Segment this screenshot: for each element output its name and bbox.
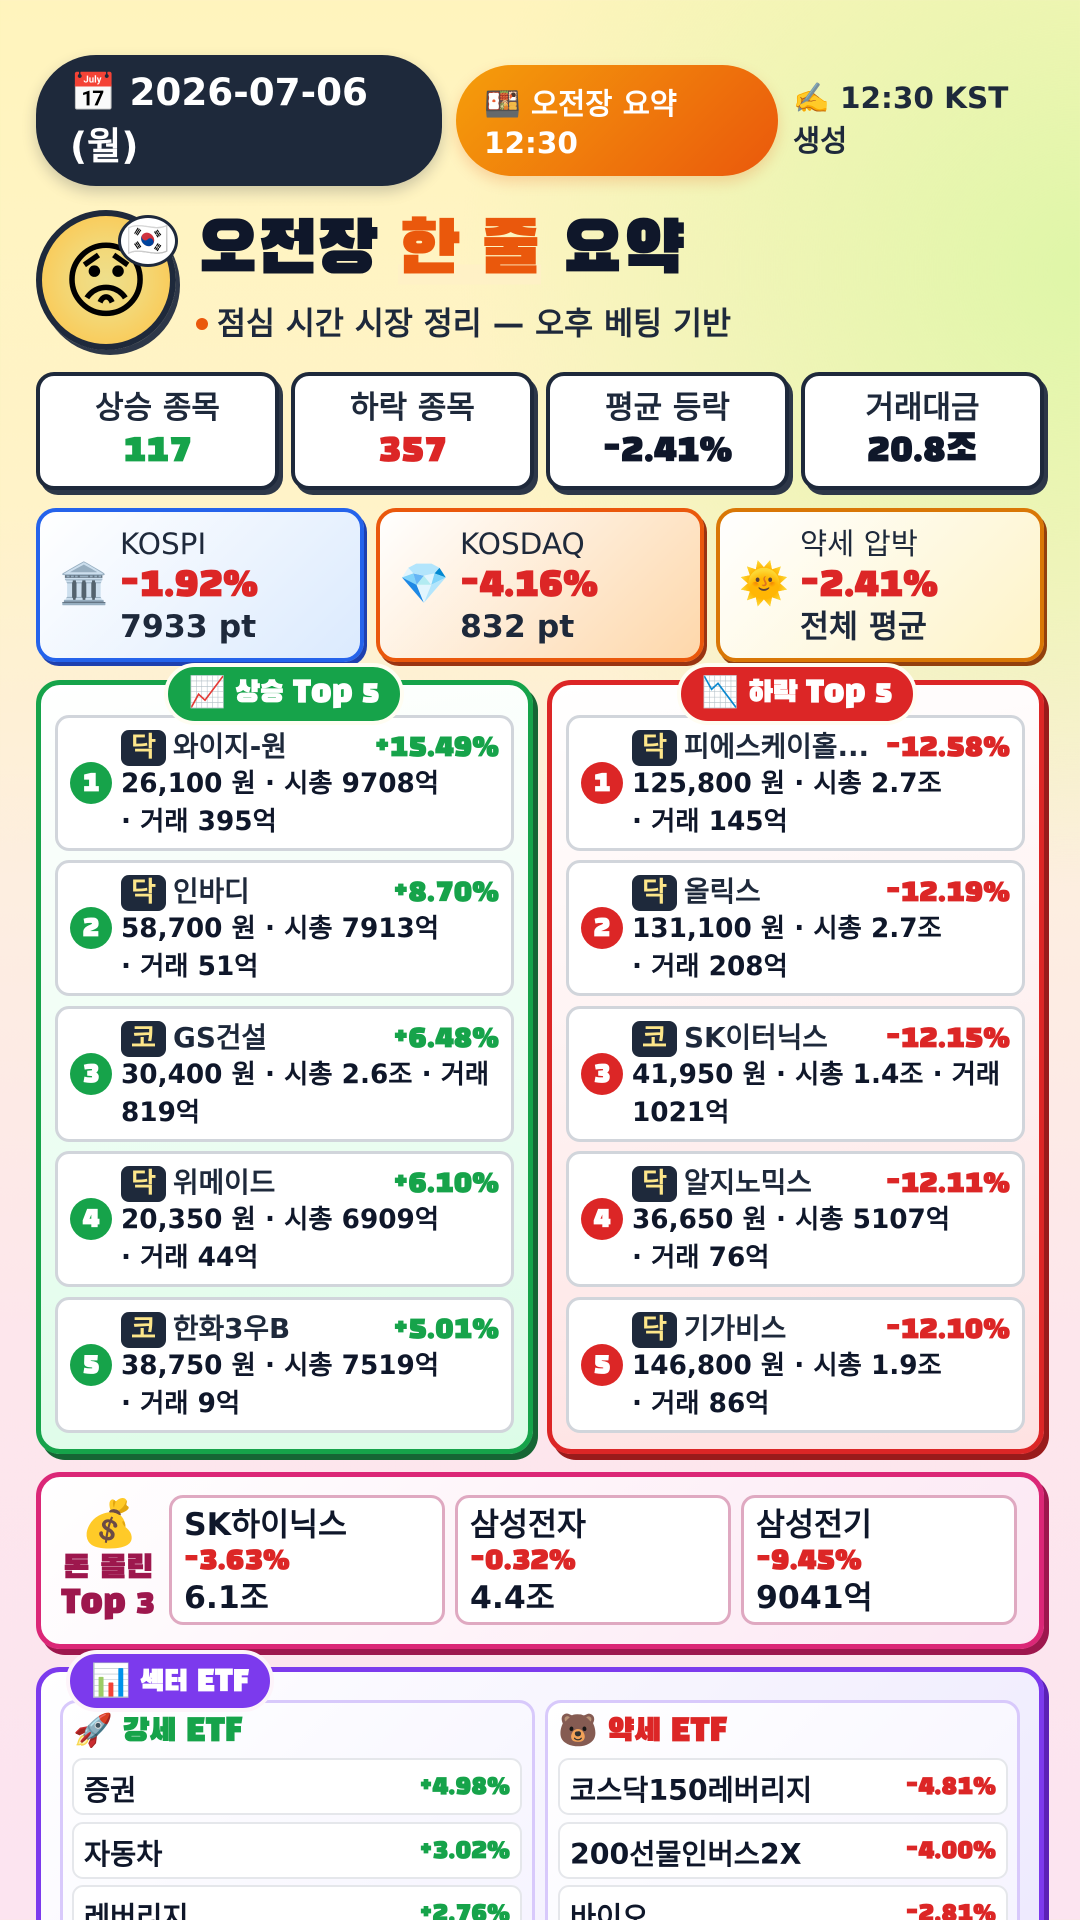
index card: KOSPI: -1.92% <box>120 564 258 605</box>
rising row 5: · 거래 9억 <box>121 1389 240 1419</box>
falling row 4: 알지노믹스 <box>684 1166 812 1199</box>
rising row 1: 26,100 원 · 시총 9708억 <box>121 769 439 799</box>
rising row 5: 5 <box>83 1351 99 1379</box>
stat: falling <box>291 372 534 490</box>
ETF row: securities <box>72 1758 522 1815</box>
rising row 3: 3 <box>83 1060 99 1088</box>
ETF row: KOSDAQ 150 leverage <box>558 1758 1008 1815</box>
rising row 4: 위메이드 <box>173 1166 275 1199</box>
rising row 4: 4 <box>83 1205 99 1233</box>
falling row 2: 131,100 원 · 시총 2.7조 <box>632 914 942 944</box>
falling row 1: 피에스케이홀... <box>684 730 869 763</box>
money flow label: Top 3 <box>61 1588 155 1620</box>
falling row 5: 기가비스 <box>684 1312 786 1345</box>
stat: average change: 평균 등락 <box>605 390 730 426</box>
index card: KOSDAQ: 832 pt <box>460 609 574 645</box>
ETF row: 200 futures inverse: -4.00% <box>906 1837 996 1864</box>
falling row 3: -12.15% <box>886 1023 1010 1054</box>
mascot icon <box>36 210 180 355</box>
ETF row: bio <box>558 1885 1008 1920</box>
rising row 2: 58,700 원 · 시총 7913억 <box>121 914 439 944</box>
strong ETF heading: 🚀 강세 ETF <box>73 1711 243 1749</box>
flag badge <box>118 215 178 267</box>
falling row 2 <box>566 860 1025 996</box>
ETF row: securities: +4.98% <box>420 1773 510 1800</box>
mascot face: 😟 <box>62 232 150 330</box>
rising row 3: GS건설 <box>173 1021 267 1054</box>
falling row 5: 146,800 원 · 시총 1.9조 <box>632 1351 942 1381</box>
falling row 1: 1 <box>594 769 610 797</box>
falling heading pill: 📉 하락 Top 5 <box>702 675 892 710</box>
money card 3: 9041억 <box>756 1580 873 1616</box>
index card: KOSPI: 🏛️ <box>59 560 109 607</box>
index card: market mood <box>716 508 1044 662</box>
rising row 4: 닥 <box>131 1168 156 1199</box>
falling row 4: 36,650 원 · 시총 5107억 <box>632 1205 950 1235</box>
rising row 3: +6.48% <box>393 1023 499 1054</box>
falling row 4: · 거래 76억 <box>632 1243 769 1273</box>
falling row 5: · 거래 86억 <box>632 1389 769 1419</box>
rising row 5: 한화3우B <box>173 1312 290 1345</box>
rising row 3: 코 <box>131 1023 156 1054</box>
rising row 3: 30,400 원 · 시총 2.6조 · 거래 <box>121 1060 489 1090</box>
falling heading pill <box>677 663 917 725</box>
rising row 5: 코 <box>131 1314 156 1345</box>
rising row 1 <box>55 715 514 851</box>
panel: falling top 5 <box>547 680 1044 1454</box>
session pill: 🍱 오전장 요약 <box>484 87 677 122</box>
panel: rising top 5 <box>36 680 533 1454</box>
stat: trading value <box>801 372 1044 490</box>
rising row 5: +5.01% <box>393 1314 499 1345</box>
sector ETF pill <box>66 1650 274 1712</box>
money card 1: SK하이닉스 <box>184 1507 347 1543</box>
subtitle: 점심 시간 시장 정리 — 오후 베팅 기반 <box>217 306 731 342</box>
falling row 3: 코 <box>642 1023 667 1054</box>
rising row 1: · 거래 395억 <box>121 807 277 837</box>
ETF row: autos: 자동차 <box>84 1838 162 1871</box>
falling row 1: · 거래 145억 <box>632 807 788 837</box>
rising row 1: 닥 <box>131 732 156 763</box>
rising row 2: · 거래 51억 <box>121 952 258 982</box>
date pill: 📅 2026-07-06 <box>70 70 368 115</box>
weak ETF heading: 🐻 약세 ETF <box>558 1711 727 1749</box>
ETF row: autos: +3.02% <box>420 1837 510 1864</box>
rising row 3 <box>55 1006 514 1142</box>
money card 1: 6.1조 <box>184 1580 269 1616</box>
stat: falling: 357 <box>378 431 447 469</box>
rising row 2: +8.70% <box>393 877 499 908</box>
ETF row: securities: 증권 <box>84 1774 136 1807</box>
stat: average change <box>546 372 789 490</box>
date pill: (월) <box>70 124 138 168</box>
money card 3: -9.45% <box>756 1545 862 1576</box>
falling row 5: 5 <box>594 1351 610 1379</box>
falling row 3 <box>566 1006 1025 1142</box>
falling row 4: 4 <box>594 1205 610 1233</box>
money flow label: 돈 몰린 <box>63 1553 153 1585</box>
falling row 2: 2 <box>594 914 610 942</box>
session pill: 12:30 <box>484 126 578 160</box>
generated time: ✍️ 12:30 KST <box>793 81 1008 116</box>
money card 1 <box>169 1495 445 1625</box>
session pill <box>456 65 778 176</box>
ETF row: autos <box>72 1822 522 1879</box>
rising row 4: · 거래 44억 <box>121 1243 258 1273</box>
generated time <box>793 81 1008 158</box>
falling row 2: 올릭스 <box>684 875 761 908</box>
money card 3: 삼성전기 <box>756 1507 872 1543</box>
ETF row: 200 futures inverse: 200선물인버스2X <box>570 1838 802 1871</box>
ETF row: 200 futures inverse <box>558 1822 1008 1879</box>
strong ETF column <box>60 1700 535 1920</box>
falling row 4: 닥 <box>642 1168 667 1199</box>
date pill <box>36 55 442 186</box>
falling row 1: -12.58% <box>886 732 1010 763</box>
index card: market mood: -2.41% <box>800 564 938 605</box>
falling row 5: -12.10% <box>886 1314 1010 1345</box>
rising row 2 <box>55 860 514 996</box>
rising row 2: 인바디 <box>173 875 250 908</box>
falling row 1: 125,800 원 · 시총 2.7조 <box>632 769 942 799</box>
rising row 4: 20,350 원 · 시총 6909억 <box>121 1205 439 1235</box>
rising row 2: 2 <box>83 914 99 942</box>
money flow label: 💰 <box>81 1497 138 1551</box>
rising row 2: 닥 <box>131 877 156 908</box>
money card 2: 삼성전자 <box>470 1507 586 1543</box>
stat: rising: 117 <box>123 431 192 469</box>
index card: market mood: 약세 압박 <box>800 527 918 561</box>
falling row 4: -12.11% <box>886 1168 1010 1199</box>
panel: sector ETF <box>36 1667 1044 1920</box>
index card: KOSDAQ: 💎 <box>399 560 449 607</box>
money card 2 <box>455 1495 731 1625</box>
rising row 3: 819억 <box>121 1098 200 1128</box>
generated time: 생성 <box>793 124 847 158</box>
stat: rising: 상승 종목 <box>95 390 220 426</box>
sector ETF pill: 📊 섹터 ETF <box>91 1661 249 1699</box>
panel: money flow top 3 <box>36 1472 1044 1649</box>
rising row 5 <box>55 1297 514 1433</box>
stat: trading value: 20.8조 <box>867 431 978 469</box>
rising row 5: 38,750 원 · 시총 7519억 <box>121 1351 439 1381</box>
falling row 5 <box>566 1297 1025 1433</box>
falling row 3: SK이터닉스 <box>684 1021 828 1054</box>
rising heading pill <box>164 663 404 725</box>
ETF row: leverage <box>72 1885 522 1920</box>
rising heading pill: 📈 상승 Top 5 <box>189 675 379 710</box>
stat: average change: -2.41% <box>603 431 732 469</box>
index card: KOSPI: 7933 pt <box>120 609 256 645</box>
index card: market mood: 🌞 <box>739 560 789 607</box>
falling row 1 <box>566 715 1025 851</box>
ETF row: KOSDAQ 150 leverage: -4.81% <box>906 1773 996 1800</box>
money card 1: -3.63% <box>184 1545 290 1576</box>
falling row 2: 닥 <box>642 877 667 908</box>
ETF row: KOSDAQ 150 leverage: 코스닥150레버리지 <box>570 1774 812 1807</box>
money card 2: -0.32% <box>470 1545 576 1576</box>
money card 2: 4.4조 <box>470 1580 555 1616</box>
stat: rising <box>36 372 279 490</box>
rising row 1: +15.49% <box>375 732 499 763</box>
stat: trading value: 거래대금 <box>865 390 980 426</box>
money card 3 <box>741 1495 1017 1625</box>
rising row 1: 와이지-원 <box>173 730 287 763</box>
index card: KOSDAQ <box>376 508 704 662</box>
falling row 3: 1021억 <box>632 1098 729 1128</box>
index card: market mood: 전체 평균 <box>800 609 927 645</box>
index card: KOSPI: KOSPI <box>120 527 206 561</box>
falling row 2: -12.19% <box>886 877 1010 908</box>
index card: KOSDAQ: KOSDAQ <box>460 527 585 561</box>
index card: KOSPI <box>36 508 364 662</box>
falling row 1: 닥 <box>642 732 667 763</box>
flag badge: 🇰🇷 <box>127 220 169 260</box>
index card: KOSDAQ: -4.16% <box>460 564 598 605</box>
mascot face <box>36 210 176 350</box>
weak ETF column <box>545 1700 1020 1920</box>
title: 오전장 한 줄 요약 <box>198 217 683 289</box>
falling row 5: 닥 <box>642 1314 667 1345</box>
falling row 2: · 거래 208억 <box>632 952 788 982</box>
falling row 4 <box>566 1151 1025 1287</box>
rising row 4 <box>55 1151 514 1287</box>
money flow label <box>61 1497 155 1620</box>
rising row 4: +6.10% <box>393 1168 499 1199</box>
falling row 3: 3 <box>594 1060 610 1088</box>
stat: falling: 하락 종목 <box>350 390 475 426</box>
falling row 3: 41,950 원 · 시총 1.4조 · 거래 <box>632 1060 1000 1090</box>
rising row 1: 1 <box>83 769 99 797</box>
